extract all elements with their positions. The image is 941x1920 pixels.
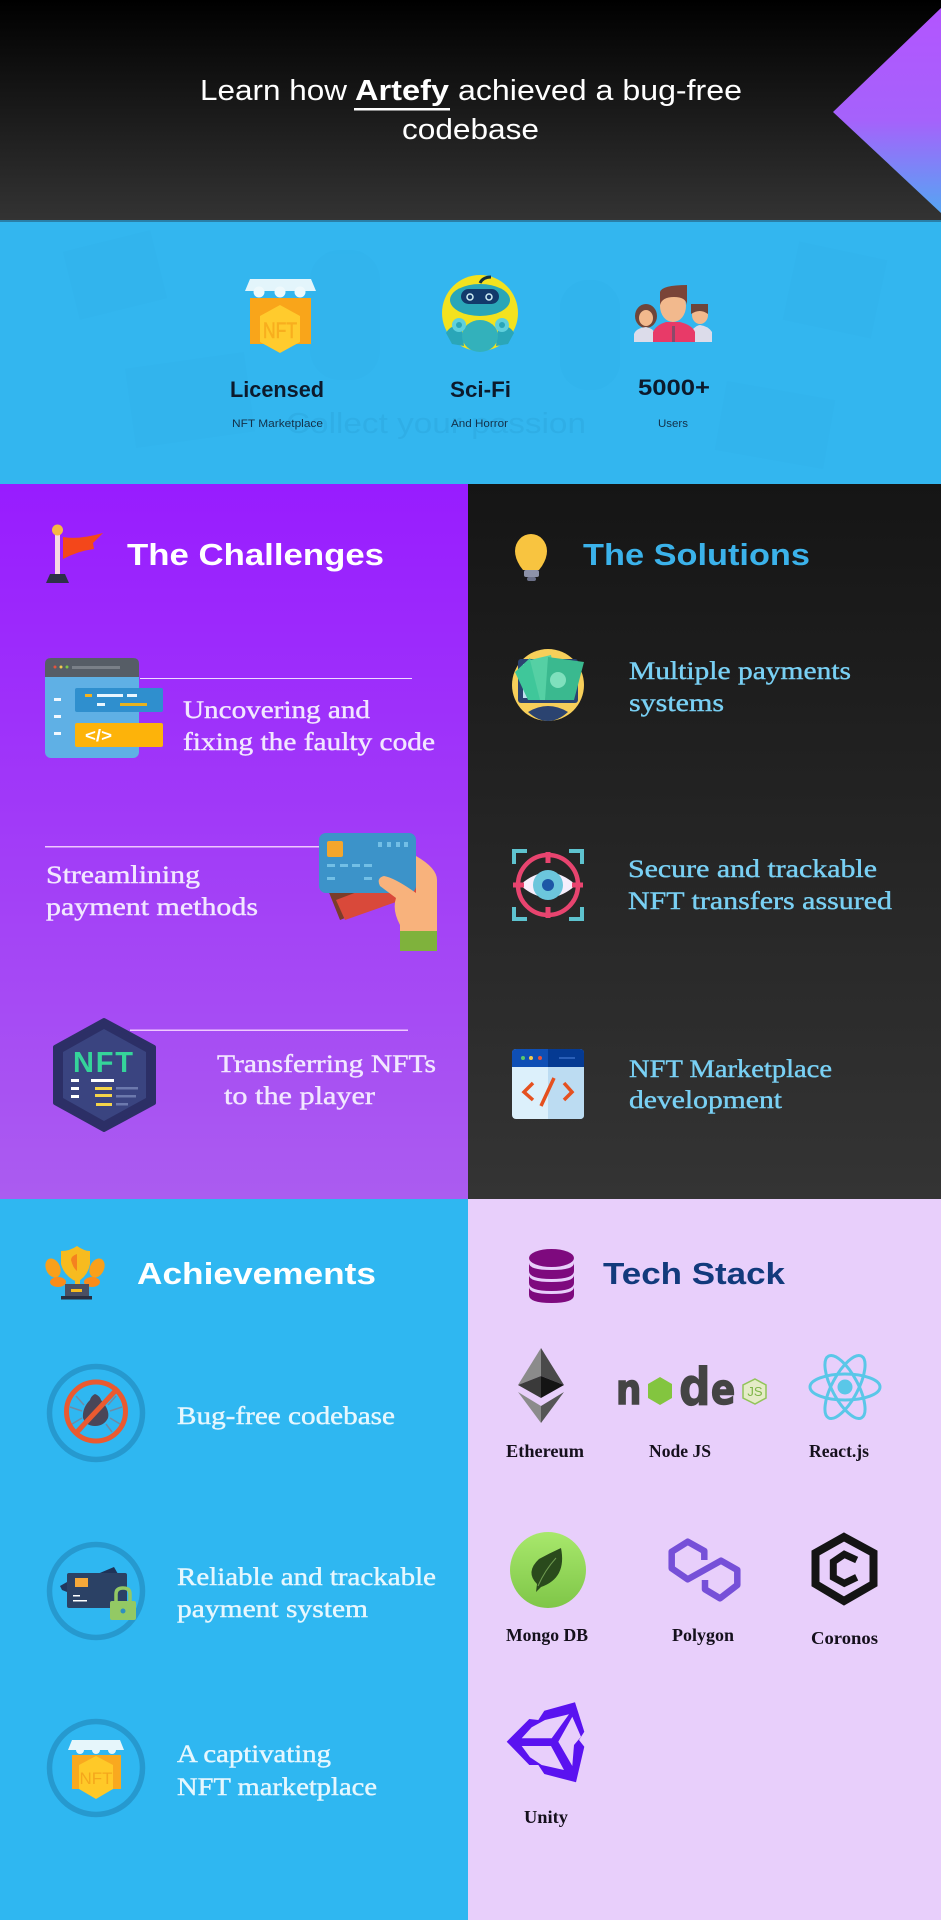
icon: code window: </> (85, 726, 112, 745)
fact: users: Users (658, 418, 689, 430)
icon: eye target (513, 851, 583, 919)
text (628, 856, 893, 915)
panel: achievements (0, 1199, 468, 1920)
fact: users: 5000+ (638, 375, 710, 400)
fact: licensed: NFT Marketplace (232, 418, 323, 430)
title: Artefy (355, 75, 449, 107)
icon: node logo (616, 1358, 766, 1418)
tech: mongo db (506, 1532, 588, 1645)
text: NFT Marketplace (629, 1056, 832, 1083)
text: to the player (224, 1083, 376, 1110)
text: NFT transfers assured (628, 888, 893, 915)
icon: users group (634, 285, 712, 342)
challenge: faulty code (45, 658, 435, 758)
text: Bug-free codebase (177, 1403, 395, 1430)
icon: light bulb (515, 534, 547, 581)
title (200, 75, 742, 146)
icon: NFT store small (50, 1722, 142, 1814)
tech: node js (616, 1358, 766, 1461)
fact: licensed (230, 377, 324, 430)
tech: ethereum (506, 1348, 584, 1461)
icon: unity cube (507, 1702, 584, 1782)
text: Secure and trackable (628, 856, 877, 883)
panel: tech stack (468, 1199, 941, 1920)
heading: tech stack: Tech Stack (603, 1256, 786, 1291)
text (46, 862, 258, 921)
label: Unity (524, 1807, 568, 1827)
icon: coronos hexagon (816, 1537, 874, 1601)
icon: code window (45, 658, 163, 758)
icon: node logo: JS (747, 1384, 763, 1399)
tech: react (809, 1350, 880, 1461)
icon: robot (442, 275, 518, 352)
icon: NFT store small: NFT (79, 1769, 113, 1788)
faint watermark slogan: Collect your passion (286, 408, 586, 440)
achievement: payment system (50, 1544, 436, 1638)
achievement: NFT marketplace (50, 1722, 377, 1814)
panel: the solutions (468, 484, 941, 1199)
text (177, 1564, 436, 1623)
text: Streamlining (46, 862, 201, 889)
text: payment system (177, 1596, 369, 1623)
text (177, 1741, 377, 1801)
text: systems (629, 690, 724, 717)
solution: trackable transfers (513, 851, 893, 919)
panel: header (0, 0, 941, 220)
icon: polygon links (672, 1542, 737, 1598)
icon: node logo: e (711, 1366, 735, 1415)
tech: unity (507, 1702, 584, 1827)
text (629, 1056, 832, 1114)
fact: sci-fi: And Horror (451, 418, 508, 430)
tech: coronos (811, 1537, 878, 1648)
challenge: transferring NFTs (55, 1020, 436, 1130)
text: Reliable and trackable (177, 1564, 436, 1591)
text: Transferring NFTs (217, 1051, 436, 1078)
label: React.js (809, 1441, 869, 1461)
text: A captivating (177, 1741, 332, 1768)
text: development (629, 1087, 782, 1114)
icon: ethereum (518, 1348, 564, 1423)
icon: card with lock (50, 1544, 142, 1638)
label: Mongo DB (506, 1625, 588, 1645)
title: achieved a bug-free (458, 75, 742, 107)
fact: licensed: Licensed (230, 377, 324, 402)
label: Polygon (672, 1625, 734, 1645)
fact: sci-fi: Sci-Fi (450, 377, 511, 402)
title: codebase (402, 114, 539, 146)
icon: hand with cards (319, 833, 437, 951)
text: NFT marketplace (177, 1774, 377, 1801)
challenge: payment methods (45, 833, 437, 951)
icon: no bug (50, 1366, 142, 1460)
solution: marketplace development (512, 1049, 832, 1119)
solution: multiple payments (512, 649, 851, 721)
panel: key facts band (0, 220, 941, 484)
icon: flag (46, 524, 103, 583)
icon: money monitor (512, 649, 584, 721)
panel: the challenges (0, 484, 468, 1199)
icon: database (529, 1249, 574, 1303)
icon: react atom (810, 1350, 880, 1424)
label: Node JS (649, 1441, 711, 1461)
icon: code browser (512, 1049, 584, 1119)
achievement: bug-free codebase (50, 1366, 395, 1460)
text: fixing the faulty code (183, 729, 435, 756)
tech: polygon (672, 1542, 737, 1645)
icon: NFT hexagon: NFT (73, 1047, 133, 1079)
icon: NFT hexagon (55, 1020, 154, 1130)
label: Ethereum (506, 1441, 584, 1461)
text (217, 1051, 436, 1110)
text: payment methods (46, 894, 258, 921)
icon: NFT store (245, 279, 316, 353)
icon: trophy (42, 1246, 108, 1300)
text: Uncovering and (183, 697, 371, 724)
label: Coronos (811, 1628, 878, 1648)
text: Multiple payments (629, 658, 851, 685)
icon: node logo: d (679, 1358, 711, 1418)
icon: NFT store: NFT (263, 318, 297, 343)
heading: the solutions: The Solutions (583, 537, 810, 572)
heading: achievements: Achievements (137, 1256, 376, 1291)
decorative triangle (833, 8, 941, 213)
title: Learn how (200, 75, 348, 107)
text (183, 697, 435, 756)
heading: the challenges: The Challenges (127, 537, 384, 572)
icon: mongo leaf (510, 1532, 586, 1608)
icon: node logo: n (616, 1366, 641, 1415)
fact: sci-fi (450, 377, 511, 430)
fact: users (638, 375, 710, 430)
text (629, 658, 851, 717)
